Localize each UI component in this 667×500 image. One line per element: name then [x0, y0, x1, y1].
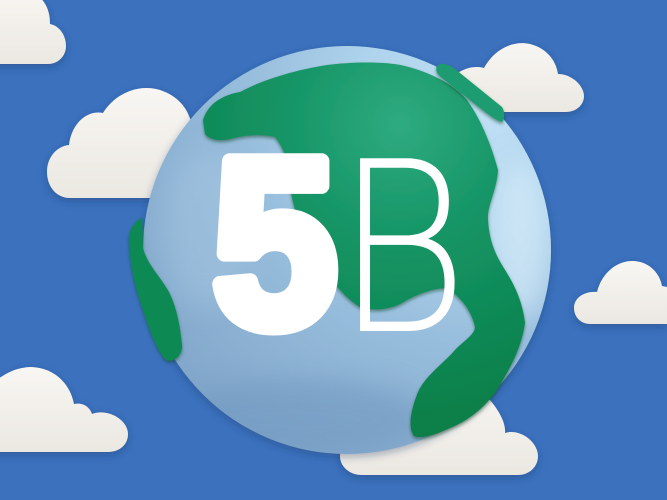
globe: ocean shading [160, 150, 550, 460]
globe: ocean sphere [143, 46, 551, 454]
cloud: upper left [47, 88, 250, 198]
number: 5: 5 [213, 109, 337, 376]
cloud: bottom left [0, 367, 128, 452]
cloud: top right [440, 43, 584, 112]
globe [129, 46, 551, 460]
cloud: top left [0, 0, 66, 64]
cloud: bottom centre [340, 380, 538, 475]
continent: main [203, 62, 525, 437]
continent: top right strip [436, 64, 504, 122]
continent: left [129, 217, 182, 361]
unit: B: B [335, 112, 468, 388]
cloud: right [574, 261, 667, 324]
